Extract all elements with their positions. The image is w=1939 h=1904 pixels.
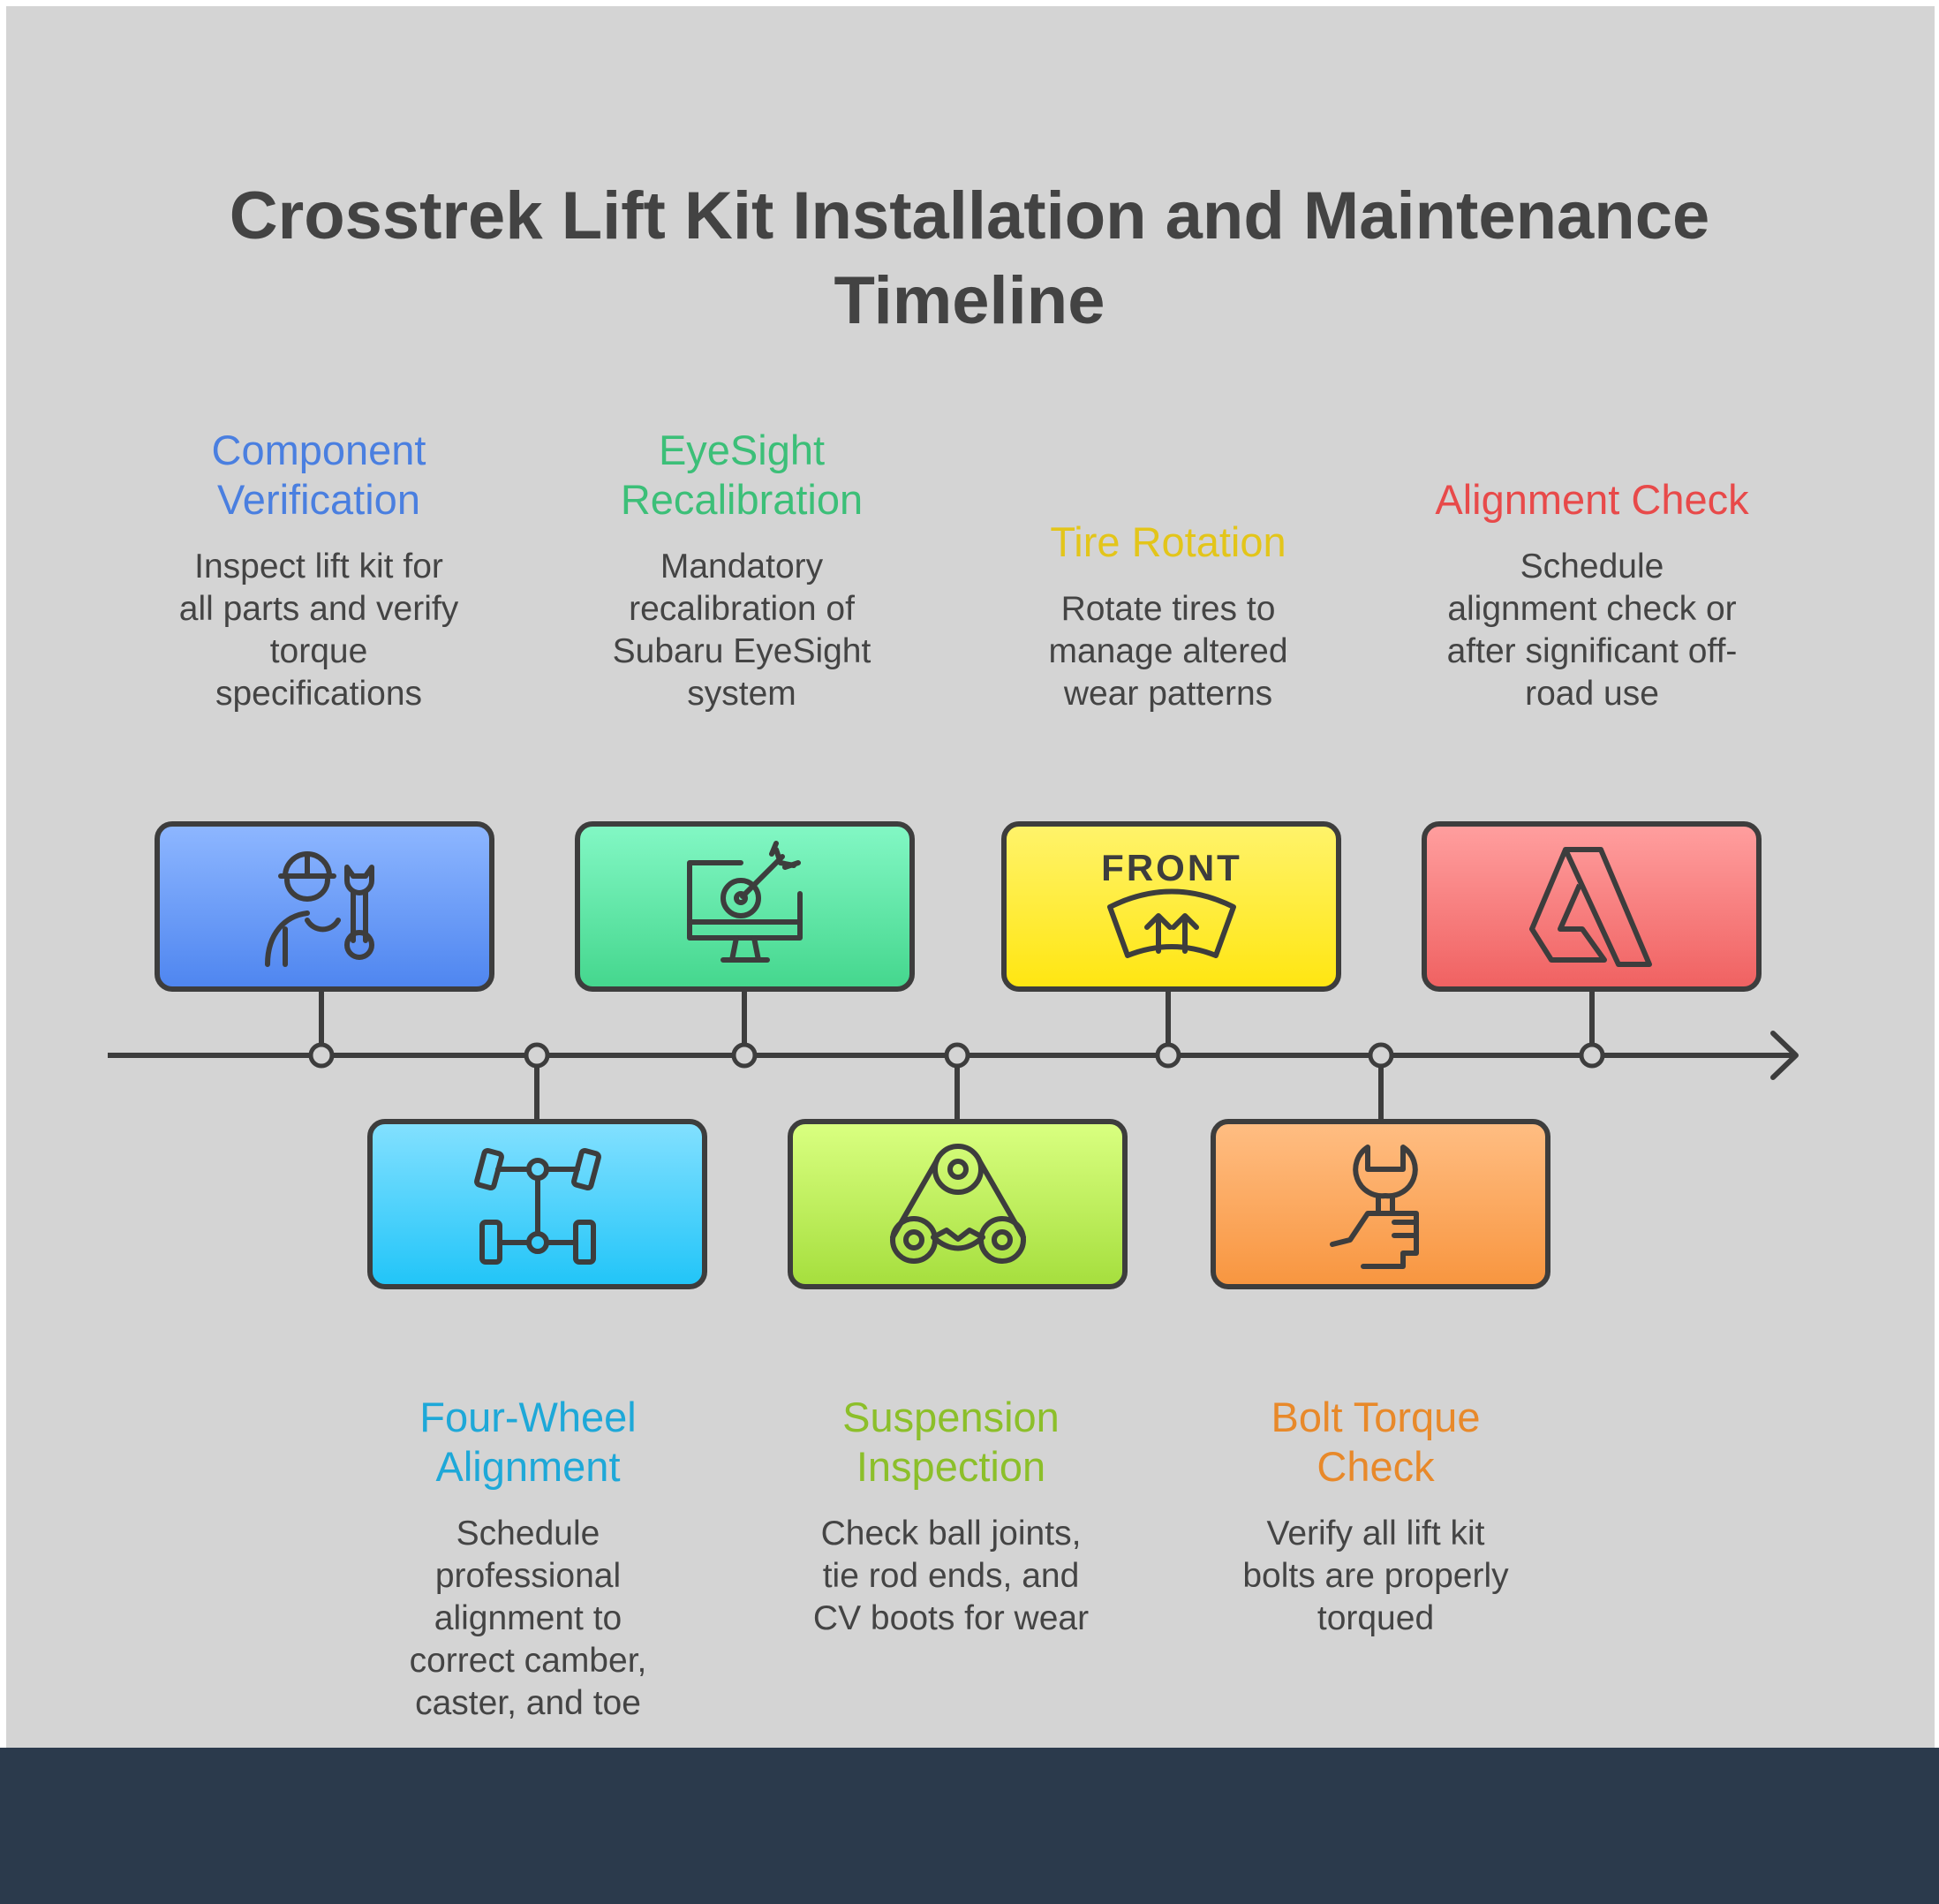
description: eyesight: recalibration of [629, 590, 855, 628]
description: eyesight: Subaru EyeSight [613, 632, 871, 670]
description: bolt torque check: torqued [1317, 1599, 1434, 1637]
panel: eyesight text [613, 427, 871, 713]
heading: suspension inspection: Inspection [856, 1443, 1045, 1490]
heading: component verification [212, 427, 426, 523]
description: eyesight: Mandatory [660, 548, 823, 586]
heading: eyesight: Recalibration [621, 476, 863, 523]
description: alignment check: after significant off- [1447, 632, 1737, 670]
title: Timeline [834, 263, 1105, 338]
description: alignment check: road use [1525, 675, 1659, 713]
description: suspension inspection [813, 1515, 1089, 1637]
box: bolt torque icon [1211, 1119, 1550, 1289]
description: four-wheel alignment: Schedule [456, 1515, 600, 1553]
description: bolt torque check [1242, 1515, 1509, 1637]
heading: eyesight [621, 427, 863, 523]
description: eyesight: system [687, 675, 796, 713]
heading: suspension inspection: Suspension [842, 1394, 1060, 1440]
icon: alignment logo [1529, 847, 1652, 967]
description: four-wheel alignment [410, 1515, 646, 1722]
heading: component verification: Component [212, 427, 426, 473]
description: suspension inspection: tie rod ends, and [823, 1557, 1079, 1595]
panel: bolt torque text [1242, 1394, 1509, 1637]
description: tire rotation: Rotate tires to [1061, 590, 1275, 628]
panel: alignment check text [1435, 476, 1749, 713]
description: four-wheel alignment: caster, and toe [415, 1684, 641, 1722]
heading: eyesight: EyeSight [659, 427, 825, 473]
heading: component verification: Verification [217, 476, 420, 523]
description: component verification: specifications [215, 675, 422, 713]
heading: bolt torque check: Bolt Torque [1271, 1394, 1480, 1440]
description: alignment check: alignment check or [1447, 590, 1737, 628]
box: suspension icon [788, 1119, 1128, 1289]
description: bolt torque check: Verify all lift kit [1266, 1515, 1485, 1553]
heading: four-wheel alignment [419, 1394, 637, 1490]
description: suspension inspection: CV boots for wear [813, 1599, 1089, 1637]
icon: monitor with target [687, 841, 803, 963]
description: four-wheel alignment: alignment to [434, 1599, 622, 1637]
description: eyesight [613, 548, 871, 713]
description: component verification: torque [270, 632, 367, 670]
description: tire rotation: manage altered [1048, 632, 1288, 670]
icon: front windshield arrows: FRONT [1101, 846, 1241, 888]
panel: tire rotation text [1048, 518, 1288, 713]
heading: tire rotation: Tire Rotation [1050, 518, 1286, 565]
title [230, 178, 1709, 338]
panel: suspension text [813, 1394, 1089, 1637]
title: Crosstrek Lift Kit Installation and Maintenance [230, 178, 1709, 253]
description: alignment check: Schedule [1520, 548, 1664, 586]
heading: suspension inspection [842, 1394, 1060, 1490]
panel: component verification text [179, 427, 459, 713]
description: suspension inspection: Check ball joints, [821, 1515, 1081, 1553]
icon: worker with wrench [265, 851, 374, 967]
description: component verification: Inspect lift kit for [194, 548, 443, 586]
icon: belt pulleys [890, 1144, 1026, 1264]
icon: front windshield arrows [1101, 846, 1241, 958]
icon: axle chassis [474, 1148, 601, 1265]
box: component verification icon [155, 821, 494, 992]
heading: four-wheel alignment: Alignment [436, 1443, 620, 1490]
description: component verification: all parts and verify [179, 590, 458, 628]
icon: hand with wrench [1330, 1145, 1419, 1269]
heading: bolt torque check [1271, 1394, 1480, 1490]
box: tire rotation icon [1001, 821, 1341, 992]
description: tire rotation: wear patterns [1064, 675, 1272, 713]
box: eyesight icon [575, 821, 915, 992]
description: component verification [179, 548, 459, 713]
box: alignment check icon [1422, 821, 1762, 992]
heading: alignment check: Alignment Check [1435, 476, 1749, 523]
box: four-wheel alignment icon [367, 1119, 707, 1289]
description: four-wheel alignment: correct camber, [410, 1642, 646, 1680]
description: alignment check [1447, 548, 1737, 713]
heading: four-wheel alignment: Four-Wheel [419, 1394, 637, 1440]
description: bolt torque check: bolts are properly [1242, 1557, 1509, 1595]
panel: four-wheel alignment text [410, 1394, 646, 1722]
description: tire rotation [1048, 590, 1288, 713]
description: four-wheel alignment: professional [435, 1557, 621, 1595]
heading: bolt torque check: Check [1317, 1443, 1435, 1490]
